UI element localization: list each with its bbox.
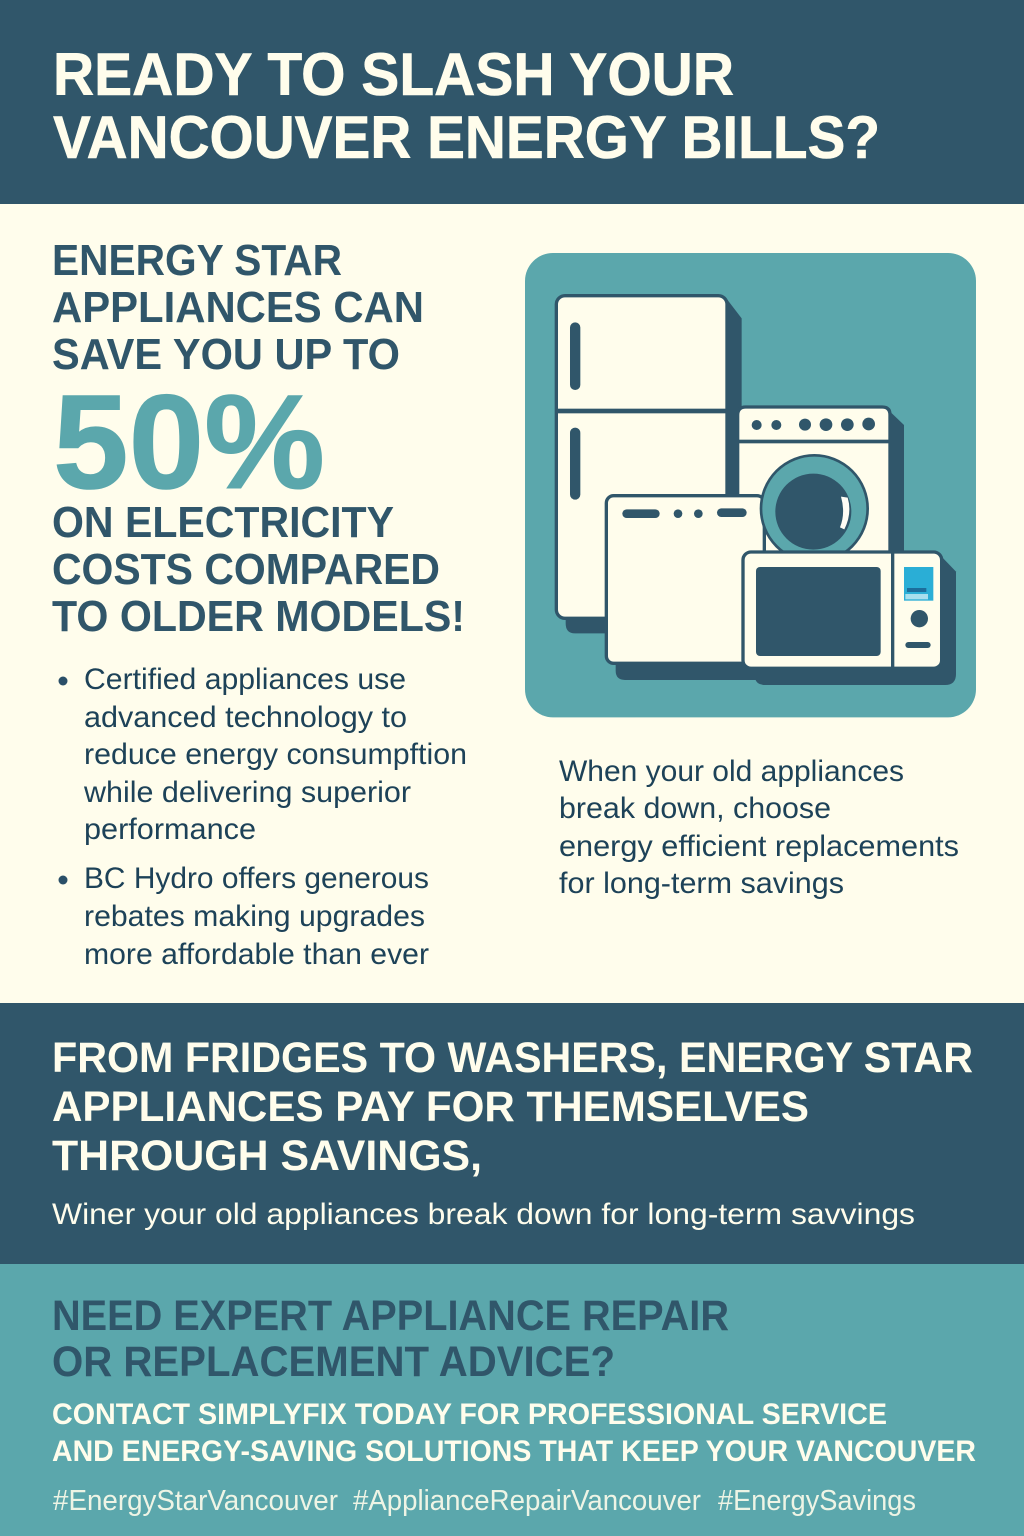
text block: replacement advice (559, 755, 959, 900)
bullet: bc hydro rebates: BC Hydro offers generous (84, 862, 429, 895)
subtext: long-term savings: Winer your old appliances break down for long-term savvings (52, 1198, 915, 1231)
call to action: CONTACT SIMPLYFIX TODAY FOR PROFESSIONAL SERVICE (52, 1398, 887, 1431)
heading: compared to older models (52, 498, 465, 641)
icon: washer door (761, 455, 868, 562)
text block: replacement advice: energy efficient replacements (559, 830, 959, 863)
hashtags: #EnergyStarVancouver (53, 1485, 338, 1517)
panel: pay for themselves band (0, 1003, 1024, 1264)
hashtags: #EnergySavings (718, 1485, 916, 1517)
heading: expert advice: NEED EXPERT APPLIANCE REPAIR (52, 1292, 729, 1340)
heading: compared to older models: TO OLDER MODELS! (52, 592, 465, 641)
heading: expert advice (52, 1292, 729, 1386)
heading: pay for themselves: FROM FRIDGES TO WASHERS, ENERGY STAR (52, 1034, 973, 1082)
heading: pay for themselves: APPLIANCES PAY FOR THEMSELVES (52, 1083, 809, 1131)
text block: replacement advice: When your old appliances (559, 755, 904, 788)
icon: refrigerator (556, 296, 742, 633)
bullet: certified appliances: advanced technology to (84, 701, 407, 734)
heading: energy star savings intro: SAVE YOU UP TO (52, 330, 400, 379)
big number: 50%: 50% (53, 368, 325, 517)
hashtags: #ApplianceRepairVancouver (353, 1485, 701, 1517)
heading: energy star savings intro (52, 236, 424, 379)
heading: pay for themselves: THROUGH SAVINGS, (52, 1132, 482, 1180)
icon: dishwasher (606, 496, 764, 680)
heading: compared to older models: ON ELECTRICITY (52, 498, 394, 547)
bullet: bc hydro rebates: rebates making upgrades (84, 900, 425, 933)
heading: energy star savings intro: APPLIANCES CAN (52, 283, 424, 332)
call to action (52, 1398, 976, 1468)
panel: appliance illustration (525, 253, 976, 717)
text block: replacement advice: break down, choose (559, 792, 831, 825)
bullet: certified appliances: performance (84, 813, 256, 846)
call to action: AND ENERGY-SAVING SOLUTIONS THAT KEEP YOUR VANCOUVER (52, 1435, 976, 1468)
bullet: bc hydro rebates (58, 862, 429, 971)
bullet: certified appliances: reduce energy consumpftion (84, 738, 467, 771)
text block: replacement advice: for long-term savings (559, 867, 844, 900)
panel: header band (0, 0, 1024, 204)
panel: contact band (0, 1264, 1024, 1536)
heading: compared to older models: COSTS COMPARED (52, 545, 440, 594)
heading: energy star savings intro: ENERGY STAR (52, 236, 342, 285)
title: READY TO SLASH YOUR (53, 41, 734, 108)
bullet: certified appliances: Certified appliances use (84, 663, 406, 696)
title: VANCOUVER ENERGY BILLS? (53, 104, 880, 171)
title (53, 41, 880, 171)
icon: washing machine (738, 407, 904, 560)
bullet: certified appliances: while delivering superior (83, 776, 411, 809)
icon: microwave (743, 552, 956, 685)
bullet: certified appliances (58, 663, 467, 846)
heading: expert advice: OR REPLACEMENT ADVICE? (52, 1338, 615, 1386)
heading: pay for themselves (52, 1034, 973, 1180)
bullet: bc hydro rebates: more affordable than ever (84, 938, 429, 971)
hashtags (53, 1485, 916, 1517)
